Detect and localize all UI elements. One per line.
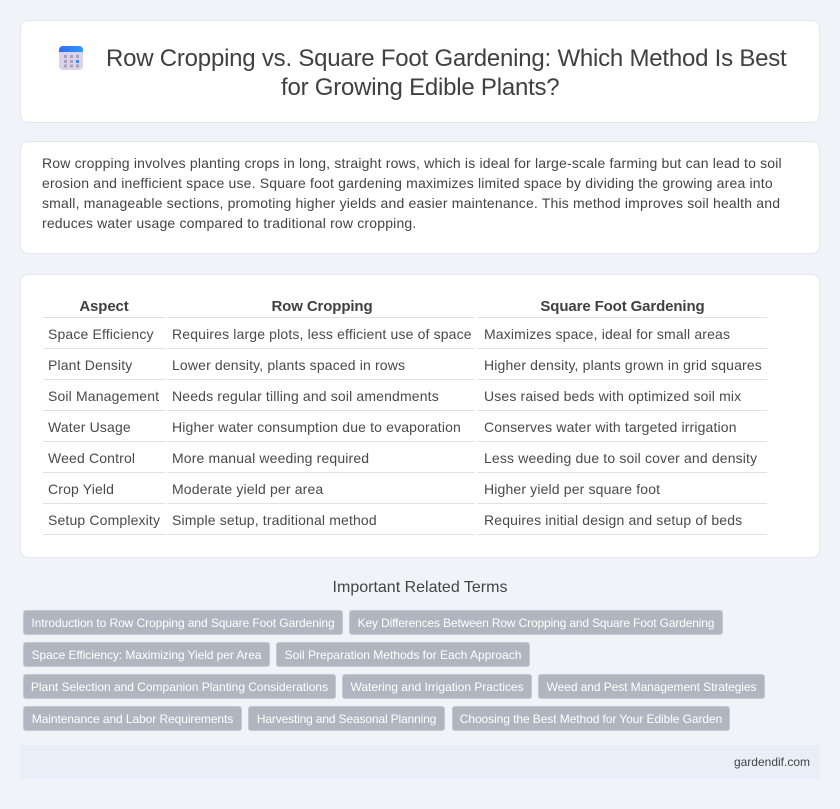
tag [538,674,765,699]
row: setup complexity [48,512,742,528]
panel: comparison table: Requires large plots, less efficient use of space [172,326,472,342]
tag [248,706,445,731]
panel: comparison table: Requires initial design and setup of beds [484,512,742,528]
title [106,45,786,101]
tag [23,642,270,667]
intro text [42,155,782,231]
header: square foot gardening: Square Foot Gardening [540,298,705,315]
row: crop yield: Crop Yield [48,481,114,497]
tag [276,642,530,667]
panel: comparison table: Needs regular tilling and soil amendments [172,388,439,404]
row: weed control: Weed Control [48,450,135,466]
row: setup complexity: Setup Complexity [48,512,160,528]
panel: comparison table: Lower density, plants spaced in rows [172,357,405,373]
row: plant density: Plant Density [48,357,132,373]
title: for Growing Edible Plants? [281,74,559,101]
header: aspect: Aspect [79,298,129,315]
panel: comparison table: Simple setup, traditional method [172,512,377,528]
tag: Weed and Pest Management Strategies [547,680,756,694]
icon: calendar [59,46,83,70]
row: weed control [48,450,758,466]
intro text: small, manageable sections, promoting higher yields and easier maintenance. This method improves soil health and [42,195,780,211]
panel: introduction [20,141,820,254]
tag: Watering and Irrigation Practices [350,680,523,694]
header: row cropping: Row Cropping [271,298,373,315]
tag: Plant Selection and Companion Planting Considerations [31,680,328,694]
tag [452,706,730,731]
intro text: reduces water usage compared to traditional row cropping. [42,215,416,231]
tag [342,674,532,699]
row: plant density [48,357,762,373]
panel: comparison table: Higher yield per square foot [484,481,660,497]
panel: header [20,20,820,123]
title: Row Cropping vs. Square Foot Gardening: Which Method Is Best [106,45,786,72]
tag: Maintenance and Labor Requirements [32,712,233,726]
related terms tags [23,610,765,731]
row: soil management [48,388,741,404]
panel: comparison table: Higher density, plants grown in grid squares [484,357,762,373]
panel: comparison table: Uses raised beds with optimized soil mix [484,388,741,404]
tag: Introduction to Row Cropping and Square Foot Gardening [31,616,335,630]
row: crop yield [48,481,660,497]
panel: comparison table: Moderate yield per area [172,481,323,497]
panel: comparison table: Conserves water with targeted irrigation [484,419,737,435]
row: water usage [48,419,737,435]
tag [349,610,723,635]
tag [23,706,242,731]
intro text: Row cropping involves planting crops in long, straight rows, which is ideal for large-scale farming but can lead to soil [42,155,782,171]
footer source: gardendif.com [734,755,810,769]
tag: Space Efficiency: Maximizing Yield per Area [32,648,261,662]
tag: Soil Preparation Methods for Each Approach [285,648,521,662]
tag: Choosing the Best Method for Your Edible Garden [460,712,722,726]
row: soil management: Soil Management [48,388,159,404]
row: water usage: Water Usage [48,419,131,435]
tag: Key Differences Between Row Cropping and Square Foot Gardening [358,616,714,630]
row: space efficiency [48,326,730,342]
panel: comparison table [20,274,820,558]
tag: Harvesting and Seasonal Planning [257,712,436,726]
intro text: erosion and inefficient space use. Square foot gardening maximizes limited space by dividing the growing area into [42,175,773,191]
tag [23,674,336,699]
panel: comparison table: Maximizes space, ideal for small areas [484,326,730,342]
tag [23,610,343,635]
footer [20,745,820,779]
panel: comparison table: Higher water consumption due to evaporation [172,419,461,435]
heading: related terms: Important Related Terms [333,579,507,596]
panel: comparison table: More manual weeding required [172,450,369,466]
panel: comparison table: Less weeding due to soil cover and density [484,450,757,466]
row: space efficiency: Space Efficiency [48,326,154,342]
